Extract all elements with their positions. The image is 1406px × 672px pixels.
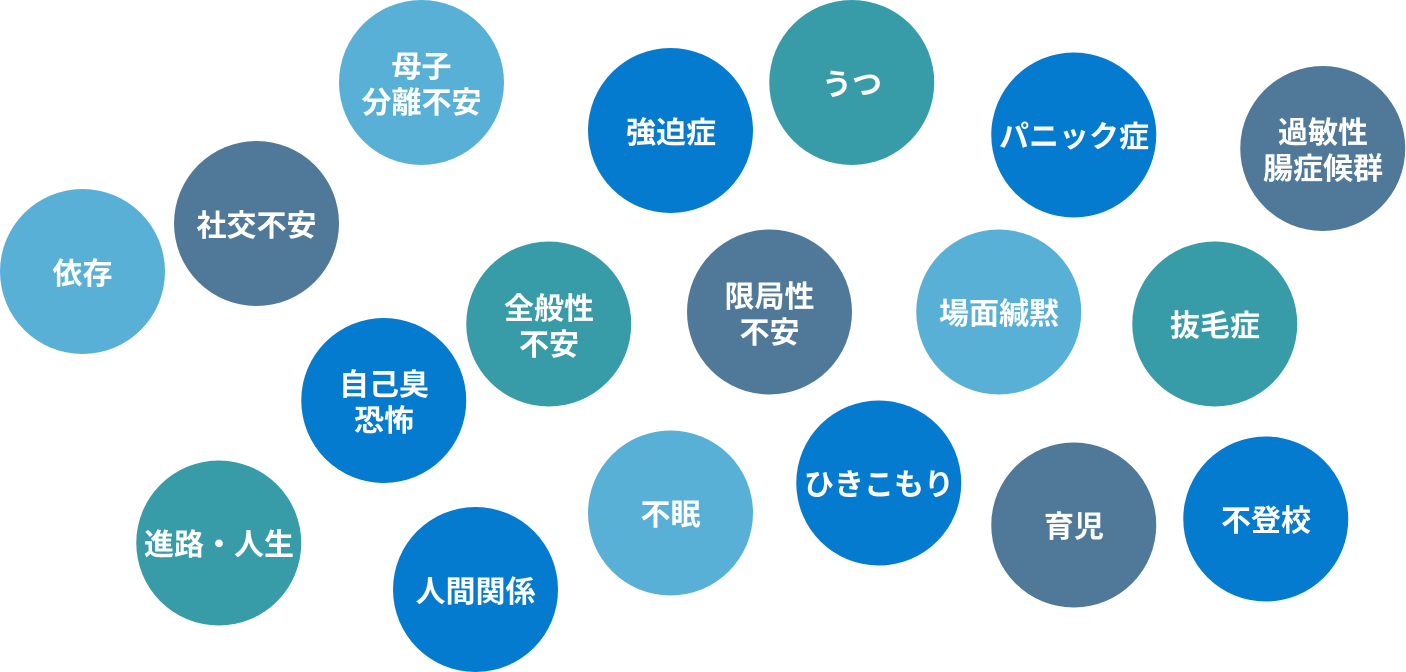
bubble: 強迫症 <box>588 48 753 213</box>
bubble: 母子分離不安 <box>339 0 504 165</box>
bubble: うつ <box>769 0 934 165</box>
bubble: 過敏性腸症候群: 過敏性 <box>1278 117 1368 150</box>
bubble: 社交不安: 社交不安 <box>196 210 316 243</box>
bubble: 強迫症: 強迫症 <box>626 117 716 150</box>
bubble: 育児: 育児 <box>1044 511 1104 544</box>
bubble: 過敏性腸症候群 <box>1240 66 1405 231</box>
bubble: 限局性不安 <box>687 230 852 394</box>
bubble: パニック症 <box>991 52 1156 218</box>
bubble: 全般性不安: 全般性 <box>504 293 594 326</box>
bubble: ひきこもり <box>796 400 961 566</box>
bubble: 不眠: 不眠 <box>640 499 700 532</box>
bubble: 自己臭恐怖: 恐怖 <box>354 405 414 438</box>
bubble: 不眠 <box>588 430 753 596</box>
bubble: 進路・人生: 進路・人生 <box>144 529 294 562</box>
bubble: 過敏性腸症候群: 腸症候群 <box>1263 153 1383 186</box>
bubble: 自己臭恐怖: 自己臭 <box>339 369 429 402</box>
bubble: 社交不安 <box>174 141 339 306</box>
bubble: 全般性不安 <box>466 242 631 406</box>
bubble: パニック症: パニック症 <box>999 121 1149 154</box>
bubble: 限局性不安: 不安 <box>740 317 800 350</box>
bubble: 不登校 <box>1183 436 1348 602</box>
bubble: 母子分離不安: 分離不安 <box>362 87 482 120</box>
bubble: ひきこもり: ひきこもり <box>804 469 954 502</box>
bubble: 人間関係: 人間関係 <box>416 576 536 609</box>
bubble: 限局性不安: 限局性 <box>724 281 814 314</box>
bubble: 全般性不安: 不安 <box>519 329 579 362</box>
bubble: 不登校: 不登校 <box>1221 505 1311 538</box>
bubble: 場面緘黙 <box>916 230 1081 394</box>
bubble: 育児 <box>991 442 1156 608</box>
bubble: 母子分離不安: 母子 <box>392 51 452 84</box>
bubble: うつ: うつ <box>822 69 882 102</box>
bubble: 進路・人生 <box>136 460 301 626</box>
bubble: 人間関係 <box>393 507 558 672</box>
bubble: 抜毛症 <box>1132 242 1297 406</box>
bubble: 自己臭恐怖 <box>301 318 466 483</box>
bubble: 抜毛症: 抜毛症 <box>1170 310 1260 343</box>
bubble: 場面緘黙: 場面緘黙 <box>939 298 1059 331</box>
bubble: 依存: 依存 <box>52 258 112 291</box>
bubble: 依存 <box>0 189 165 354</box>
